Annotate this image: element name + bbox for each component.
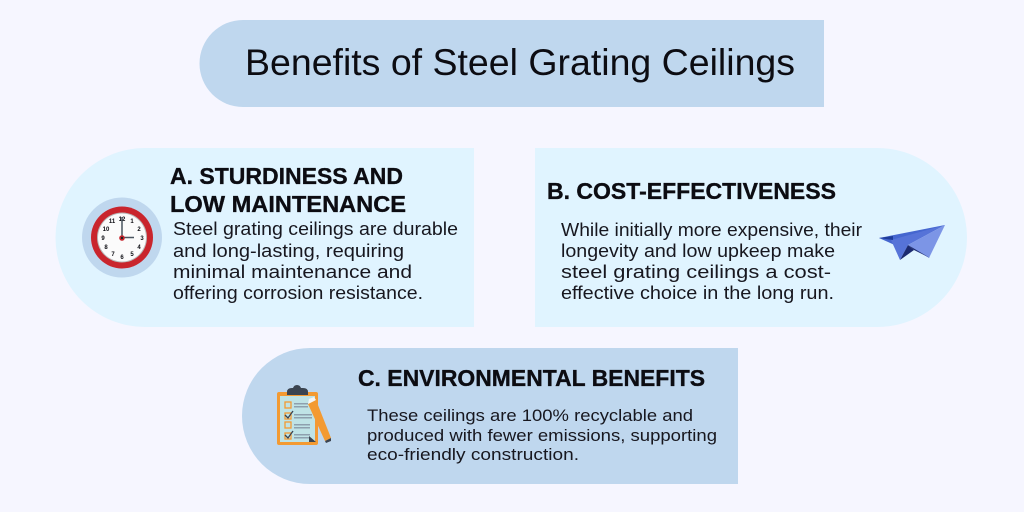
text block: A: offering corrosion resistance.	[173, 283, 423, 303]
text block: C: produced with fewer emissions, supporting	[367, 426, 717, 445]
text block: B: steel grating ceilings a cost-	[561, 262, 831, 282]
icon: wall clock: 1	[130, 219, 134, 225]
icon: wall clock: 10	[103, 227, 110, 233]
heading: A: A. STURDINESS AND	[170, 163, 403, 189]
icon: wall clock: 11	[109, 219, 116, 225]
heading: C: C. ENVIRONMENTAL BENEFITS	[358, 365, 705, 391]
heading: B: B. COST-EFFECTIVENESS	[547, 178, 836, 204]
text block: A: and long-lasting, requiring	[173, 241, 404, 261]
title banner	[200, 20, 824, 107]
title banner: Benefits of Steel Grating Ceilings	[245, 42, 795, 83]
icon: wall clock: 5	[130, 252, 134, 258]
text block: C: These ceilings are 100% recyclable and	[367, 406, 693, 425]
panel: B. cost-effectiveness	[535, 148, 967, 327]
text block: B: effective choice in the long run.	[561, 283, 834, 303]
text block: C: eco-friendly construction.	[367, 445, 579, 464]
text block: A: minimal maintenance and	[173, 262, 412, 282]
icon: wall clock: 2	[137, 227, 141, 233]
icon: clipboard checklist	[277, 385, 331, 445]
icon: wall clock: 6	[120, 255, 124, 261]
icon: wall clock: 4	[137, 245, 141, 251]
text block: A	[173, 219, 458, 303]
icon: wall clock: 7	[111, 252, 115, 258]
text block: A: Steel grating ceilings are durable	[173, 219, 458, 239]
heading: A	[170, 163, 406, 217]
panel: A. sturdiness and low maintenance	[55, 148, 474, 327]
panel: C. environmental benefits	[242, 348, 738, 484]
icon: wall clock	[82, 198, 162, 278]
icon: wall clock: 12	[119, 217, 126, 223]
icon: wall clock: 9	[101, 236, 105, 242]
icon: wall clock: 8	[104, 245, 108, 251]
text block: B: While initially more expensive, their	[561, 220, 862, 240]
text block: C	[367, 406, 717, 464]
text block: B: longevity and low upkeep make	[561, 241, 835, 261]
heading: A: LOW MAINTENANCE	[170, 191, 406, 217]
text block: B	[561, 220, 862, 303]
icon: wall clock: 3	[140, 236, 144, 242]
icon: paper plane	[879, 225, 945, 260]
